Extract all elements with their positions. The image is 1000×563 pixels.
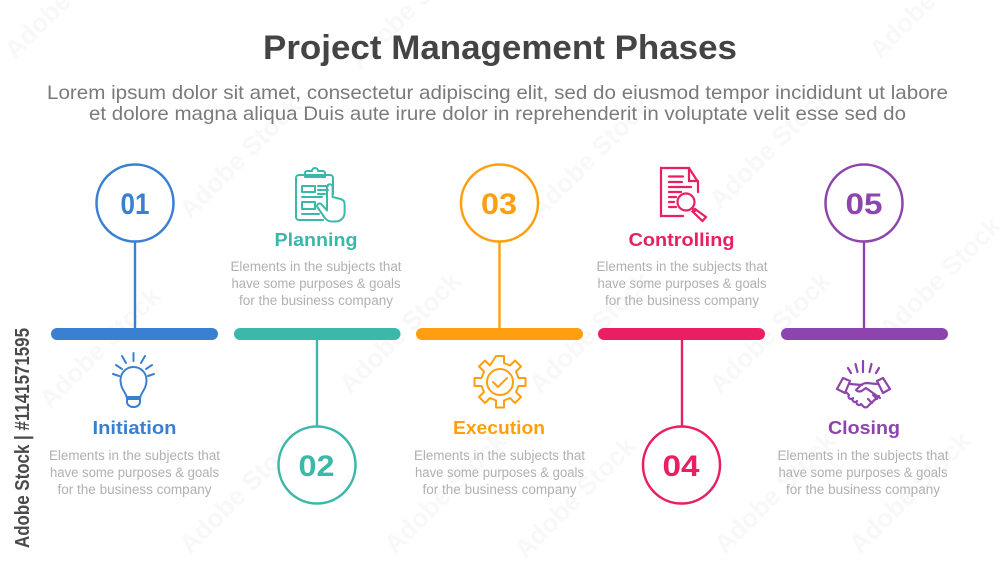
phase 1: initiation bbox=[49, 164, 220, 497]
number circle 01: 01 bbox=[120, 188, 150, 221]
timeline bar 2 bbox=[234, 328, 400, 340]
connector 2 bbox=[316, 339, 318, 427]
description 1: have some purposes & goals bbox=[50, 465, 219, 480]
timeline bar 1 bbox=[51, 328, 218, 340]
heading: execution: Execution bbox=[453, 417, 545, 438]
heading: initiation: Initiation bbox=[92, 417, 176, 438]
connector 5 bbox=[863, 241, 865, 329]
description 3 bbox=[414, 448, 585, 497]
heading: closing: Closing bbox=[828, 417, 900, 438]
description 2: Elements in the subjects that bbox=[230, 259, 402, 274]
heading: planning: Planning bbox=[274, 229, 358, 250]
phase 2: planning bbox=[230, 168, 402, 504]
description 4: Elements in the subjects that bbox=[596, 259, 768, 274]
icon: gear with check bbox=[474, 356, 526, 408]
background watermark: Adobe Stock bbox=[523, 265, 657, 399]
background watermark: Adobe Stock bbox=[33, 280, 167, 414]
background watermark: Adobe Stock bbox=[843, 425, 977, 559]
icon: handshake bbox=[837, 361, 890, 407]
number circle 04: 04 bbox=[662, 450, 700, 483]
background watermark: Adobe Stock bbox=[378, 425, 512, 559]
background watermark: Adobe Stock bbox=[523, 90, 657, 224]
description 2 bbox=[230, 259, 402, 308]
description 5 bbox=[778, 448, 949, 497]
number circle 01 bbox=[96, 164, 174, 242]
phase 4: controlling bbox=[596, 168, 768, 504]
description 3: have some purposes & goals bbox=[415, 465, 584, 480]
description 2: for the business company bbox=[239, 293, 393, 308]
connector 3 bbox=[498, 241, 501, 329]
description 5: Elements in the subjects that bbox=[778, 448, 949, 463]
timeline bar 3 bbox=[416, 328, 583, 340]
title: Project Management Phases bbox=[263, 29, 737, 67]
background watermark: Adobe Stock bbox=[703, 265, 837, 399]
description 1: for the business company bbox=[58, 482, 212, 497]
icon: light bulb bbox=[113, 353, 154, 407]
stock id vertical label: Adobe Stock | #1141571595 bbox=[12, 328, 34, 548]
description 4: for the business company bbox=[605, 293, 759, 308]
description 1: Elements in the subjects that bbox=[49, 448, 220, 463]
number circle 02 bbox=[278, 426, 356, 504]
description 5: have some purposes & goals bbox=[778, 465, 948, 480]
heading: controlling: Controlling bbox=[628, 229, 734, 250]
timeline bar 5 bbox=[781, 328, 948, 340]
number circle 05: 05 bbox=[846, 188, 882, 221]
phase 5: closing bbox=[778, 164, 949, 497]
phase 3: execution bbox=[414, 164, 585, 497]
icon: clipboard with hand bbox=[296, 168, 345, 222]
subtitle text: et dolore magna aliqua Duis aute irure dolor in reprehenderit in voluptate velit esse sed do bbox=[89, 103, 906, 125]
description 4: have some purposes & goals bbox=[598, 276, 767, 291]
description 3: for the business company bbox=[422, 482, 577, 497]
description 3: Elements in the subjects that bbox=[414, 448, 585, 463]
number circle 05 bbox=[826, 164, 902, 242]
background watermark: Adobe Stock bbox=[333, 265, 467, 399]
description 2: have some purposes & goals bbox=[232, 276, 401, 291]
description 1 bbox=[49, 448, 220, 497]
connector 4 bbox=[681, 339, 683, 427]
subtitle text bbox=[47, 82, 948, 125]
background watermark: Adobe Stock bbox=[173, 425, 307, 559]
background watermark: Adobe Stock bbox=[703, 80, 837, 214]
number circle 04 bbox=[643, 426, 720, 504]
background watermark: Adobe Stock bbox=[708, 425, 842, 559]
description 4 bbox=[596, 259, 768, 308]
background watermark: Adobe Stock bbox=[173, 90, 307, 224]
number circle 02: 02 bbox=[298, 450, 334, 483]
number circle 03: 03 bbox=[481, 188, 517, 221]
subtitle text: Lorem ipsum dolor sit amet, consectetur adipiscing elit, sed do eiusmod tempor incididunt ut labore bbox=[47, 82, 948, 104]
number circle 03 bbox=[461, 164, 538, 242]
icon: document with magnifier bbox=[661, 168, 706, 221]
background watermark: Adobe Stock bbox=[508, 430, 642, 563]
timeline bar 4 bbox=[598, 328, 765, 340]
connector 1 bbox=[134, 241, 136, 329]
description 5: for the business company bbox=[786, 482, 940, 497]
